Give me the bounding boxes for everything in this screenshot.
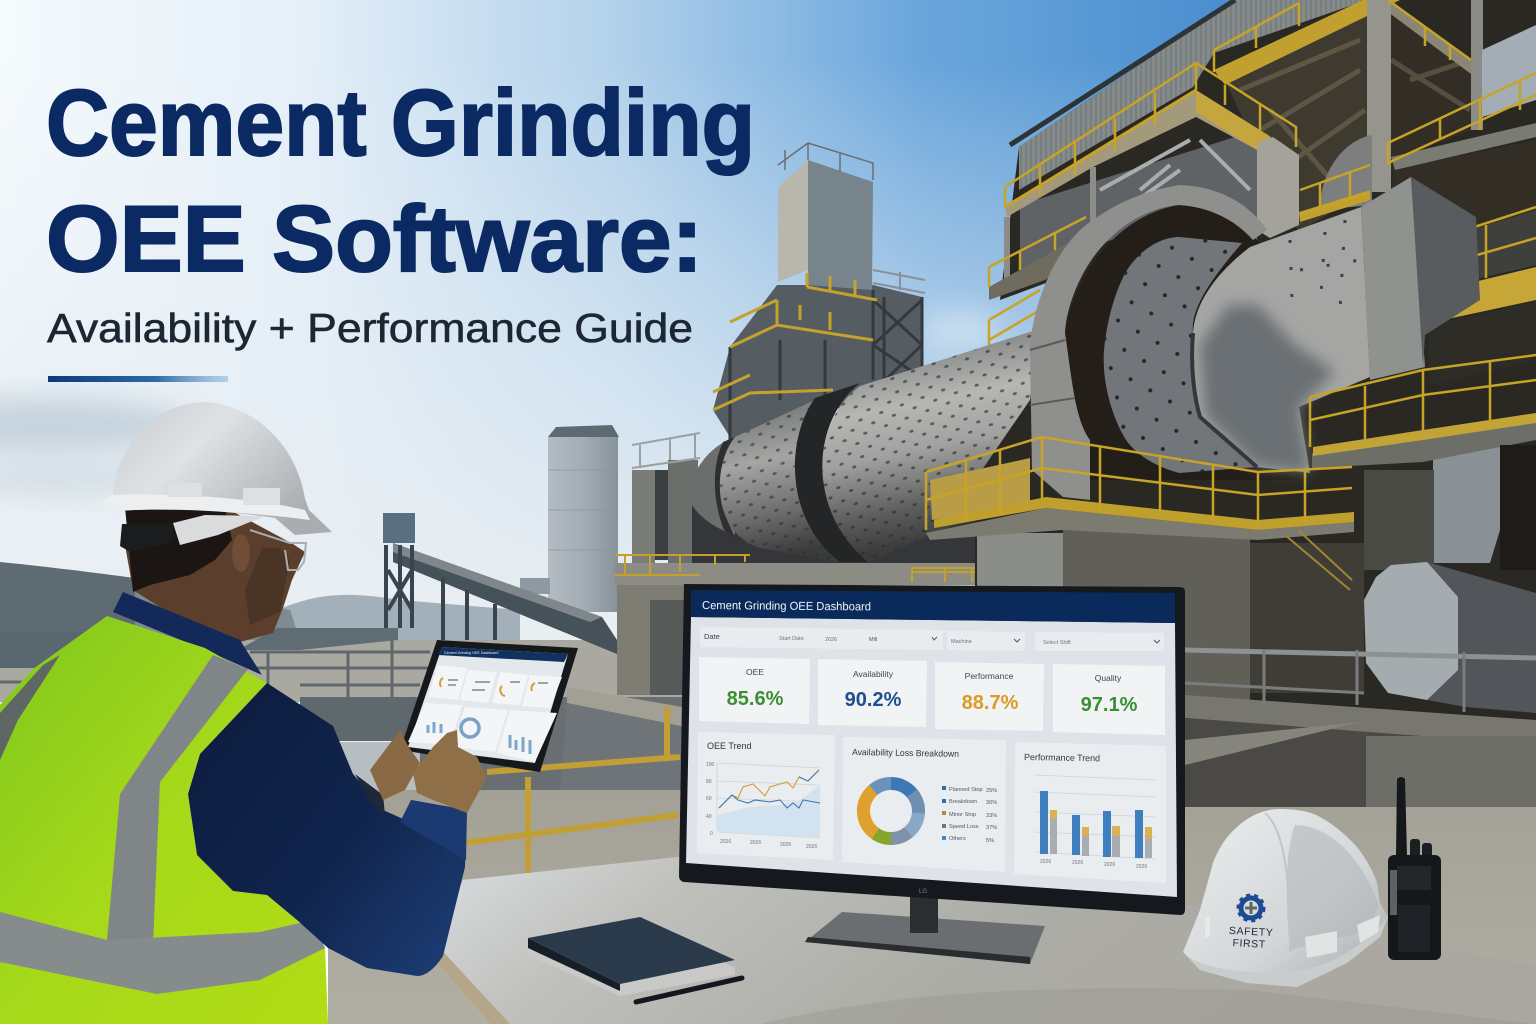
concrete columns xyxy=(1367,0,1391,192)
right yellow deck beam xyxy=(1429,267,1536,323)
inner dark cavity xyxy=(1065,205,1300,480)
notebook xyxy=(528,917,735,996)
shirt collar xyxy=(113,592,262,675)
worker hands xyxy=(370,730,487,813)
dome equipment xyxy=(1320,135,1372,210)
corrugated roof siding xyxy=(1010,0,1367,190)
KPI card: quality xyxy=(1053,664,1165,735)
panel: performance trend xyxy=(1014,742,1166,883)
silo xyxy=(520,425,619,612)
donut legend: 30% xyxy=(986,800,997,806)
building upper structure xyxy=(989,0,1536,385)
panel: OEE trend: 2026 xyxy=(780,842,791,848)
donut legend: 33% xyxy=(986,813,997,819)
donut chart xyxy=(852,772,930,850)
title xyxy=(46,70,755,291)
donut legend: 5% xyxy=(986,838,994,844)
filter bar xyxy=(700,627,1164,651)
monitor bezel xyxy=(679,584,1185,915)
shadow under drum xyxy=(692,470,980,570)
panel: OEE trend: 80 xyxy=(706,779,712,785)
safety vest xyxy=(0,616,328,1024)
spare hard hat xyxy=(1183,809,1388,987)
KPI card: performance xyxy=(935,662,1044,731)
walkie-talkie xyxy=(1388,777,1441,960)
donut legend: 37% xyxy=(986,825,997,831)
concrete post xyxy=(1257,137,1299,238)
upper concrete beams xyxy=(1214,0,1400,85)
mill head shell xyxy=(1104,237,1257,473)
small left deck xyxy=(989,233,1086,300)
conveyor gantry xyxy=(383,513,617,654)
donut legend: Speed Loss xyxy=(949,824,979,830)
worker xyxy=(0,402,467,1024)
tablet: Cement Grinding OEE Dashboard xyxy=(444,651,498,655)
KPI card: quality: Quality xyxy=(1095,673,1122,683)
dashboard header xyxy=(691,590,1175,623)
panel: performance trend: 2026 xyxy=(1136,864,1147,870)
worker hard hat xyxy=(100,402,332,552)
KPI card: quality: 97.1% xyxy=(1081,694,1138,716)
title: OEE Software: xyxy=(46,186,703,291)
helmet suspension strap xyxy=(120,515,265,552)
dashboard header: Cement Grinding OEE Dashboard xyxy=(702,599,871,613)
title underline xyxy=(48,376,228,382)
under-deck equipment xyxy=(1020,130,1257,280)
filter bar: Mill xyxy=(869,637,877,643)
panel: OEE trend: 2026 xyxy=(720,839,731,845)
donut legend: Breakdown xyxy=(949,799,977,805)
KPI card: OEE: 85.6% xyxy=(727,688,784,710)
panel: OEE trend: 2026 xyxy=(806,844,817,850)
logo: gear xyxy=(1238,895,1264,921)
panel: OEE trend: 100 xyxy=(706,762,715,768)
text: safety first: SAFETY xyxy=(1229,925,1274,939)
KPI card: OEE xyxy=(699,657,810,724)
yellow railings upper xyxy=(989,0,1536,345)
text: safety first xyxy=(1229,925,1274,951)
background: distant plant ground xyxy=(0,628,700,792)
worker shirt sleeve xyxy=(188,683,467,976)
panel: performance trend: 2026 xyxy=(1072,860,1083,866)
mill end housing xyxy=(1361,177,1480,380)
flange ring xyxy=(1030,185,1267,500)
ground floor xyxy=(328,790,1536,1024)
pen xyxy=(636,978,742,1002)
filter bar: Machine xyxy=(951,639,972,645)
donut legend: 25% xyxy=(986,788,997,794)
panel: performance trend: Performance Trend xyxy=(1024,752,1100,763)
drum end section xyxy=(692,437,735,535)
right dark under deck xyxy=(1429,302,1536,385)
filter bar: Date xyxy=(704,632,720,641)
monitor logo: LG xyxy=(919,889,927,895)
panel: OEE trend: 40 xyxy=(706,814,712,820)
deck beam xyxy=(1005,90,1271,217)
panel: OEE trend: OEE Trend xyxy=(707,741,752,751)
ball mill large flange and shell xyxy=(1030,177,1480,500)
drum middle section xyxy=(720,400,840,562)
mid deck with railing xyxy=(926,437,1354,590)
KPI card: availability: Availability xyxy=(853,669,894,679)
ball mill drum xyxy=(692,330,1036,562)
panel: OEE trend: 60 xyxy=(706,796,712,802)
panel: performance trend: 2026 xyxy=(1104,862,1115,868)
title: Cement Grinding xyxy=(46,70,755,175)
concrete base platform xyxy=(615,555,975,695)
filter bar: Select Shift xyxy=(1043,640,1071,646)
donut legend: Others xyxy=(949,836,966,842)
panel: performance trend: 2026 xyxy=(1040,859,1051,865)
right concrete deck xyxy=(1391,123,1536,170)
filter bar: Start Date xyxy=(779,636,804,642)
panel: availability loss breakdown xyxy=(842,737,1006,872)
text: safety first: FIRST xyxy=(1232,937,1266,951)
watch cuff xyxy=(355,774,385,815)
KPI card: performance: 88.7% xyxy=(962,692,1019,714)
preheater tower xyxy=(632,143,925,565)
mill drum body xyxy=(1191,207,1370,473)
right panels xyxy=(1429,210,1536,290)
KPI card: availability: 90.2% xyxy=(845,689,902,711)
lower structure xyxy=(977,355,1536,700)
panel: OEE trend: 0 xyxy=(710,831,713,837)
donut legend: Minor Stop xyxy=(949,812,976,818)
safety glasses xyxy=(250,530,306,570)
worker neck and head xyxy=(125,507,305,642)
yellow fence near worker xyxy=(463,707,680,873)
panel: availability loss breakdown: Availability Loss Breakdown xyxy=(852,747,959,759)
tablet xyxy=(400,640,578,772)
panel: OEE trend xyxy=(697,732,835,860)
KPI card: availability xyxy=(818,659,927,727)
screen background xyxy=(686,617,1177,897)
drum main section xyxy=(822,330,1036,562)
monitor xyxy=(679,584,1185,915)
steel handrail and beam xyxy=(1185,650,1536,830)
monitor stand xyxy=(805,885,1045,964)
KPI card: performance: Performance xyxy=(965,671,1014,681)
storage tank xyxy=(1364,562,1536,713)
subtitle: Availability + Performance Guide xyxy=(47,305,693,351)
distant hills xyxy=(0,562,520,660)
donut legend: Planned Stop xyxy=(949,787,983,793)
filter bar: 2026 xyxy=(825,637,837,643)
KPI card: OEE: OEE xyxy=(746,667,764,677)
panel: OEE trend: 2026 xyxy=(750,840,761,846)
background: sky xyxy=(0,0,1536,760)
donut legend xyxy=(942,786,997,844)
corrugated panel right xyxy=(1482,25,1536,117)
drum dark ring xyxy=(795,383,868,562)
upper level underside xyxy=(1225,7,1367,232)
building dark backing xyxy=(975,0,1536,800)
table xyxy=(430,857,1536,1024)
